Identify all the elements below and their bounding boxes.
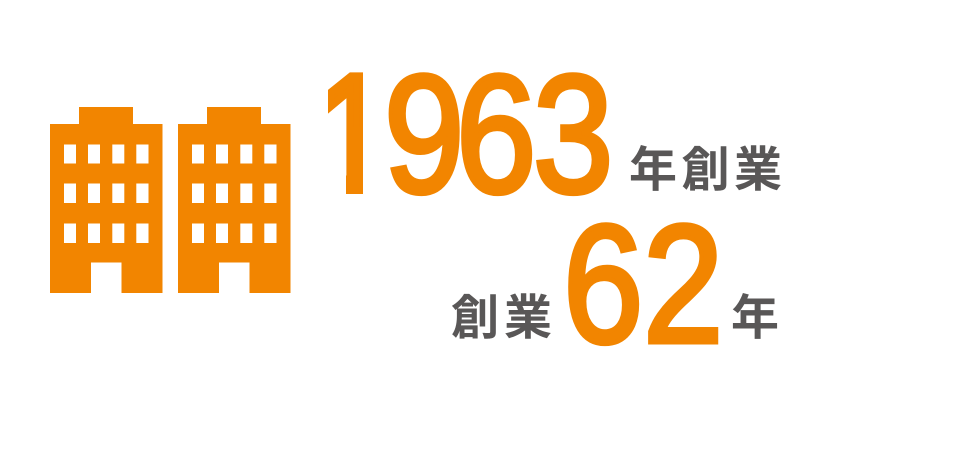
label: 年創業: 年創業 xyxy=(629,144,782,197)
icon: right building xyxy=(178,107,290,293)
year 1963 xyxy=(328,72,610,196)
year 1963: 3 xyxy=(533,41,613,228)
years 62 xyxy=(563,191,723,378)
years 62: 6 xyxy=(563,191,643,378)
year 1963: 9 xyxy=(384,41,464,228)
label: 年: 年 xyxy=(731,292,779,345)
icon: two office buildings xyxy=(50,107,290,293)
year 1963: 1 xyxy=(314,41,394,228)
year 1963: 6 xyxy=(456,41,536,228)
icon: left building xyxy=(50,107,162,293)
years 62: 2 xyxy=(643,191,723,378)
label: 創業: 創業 xyxy=(451,292,552,345)
